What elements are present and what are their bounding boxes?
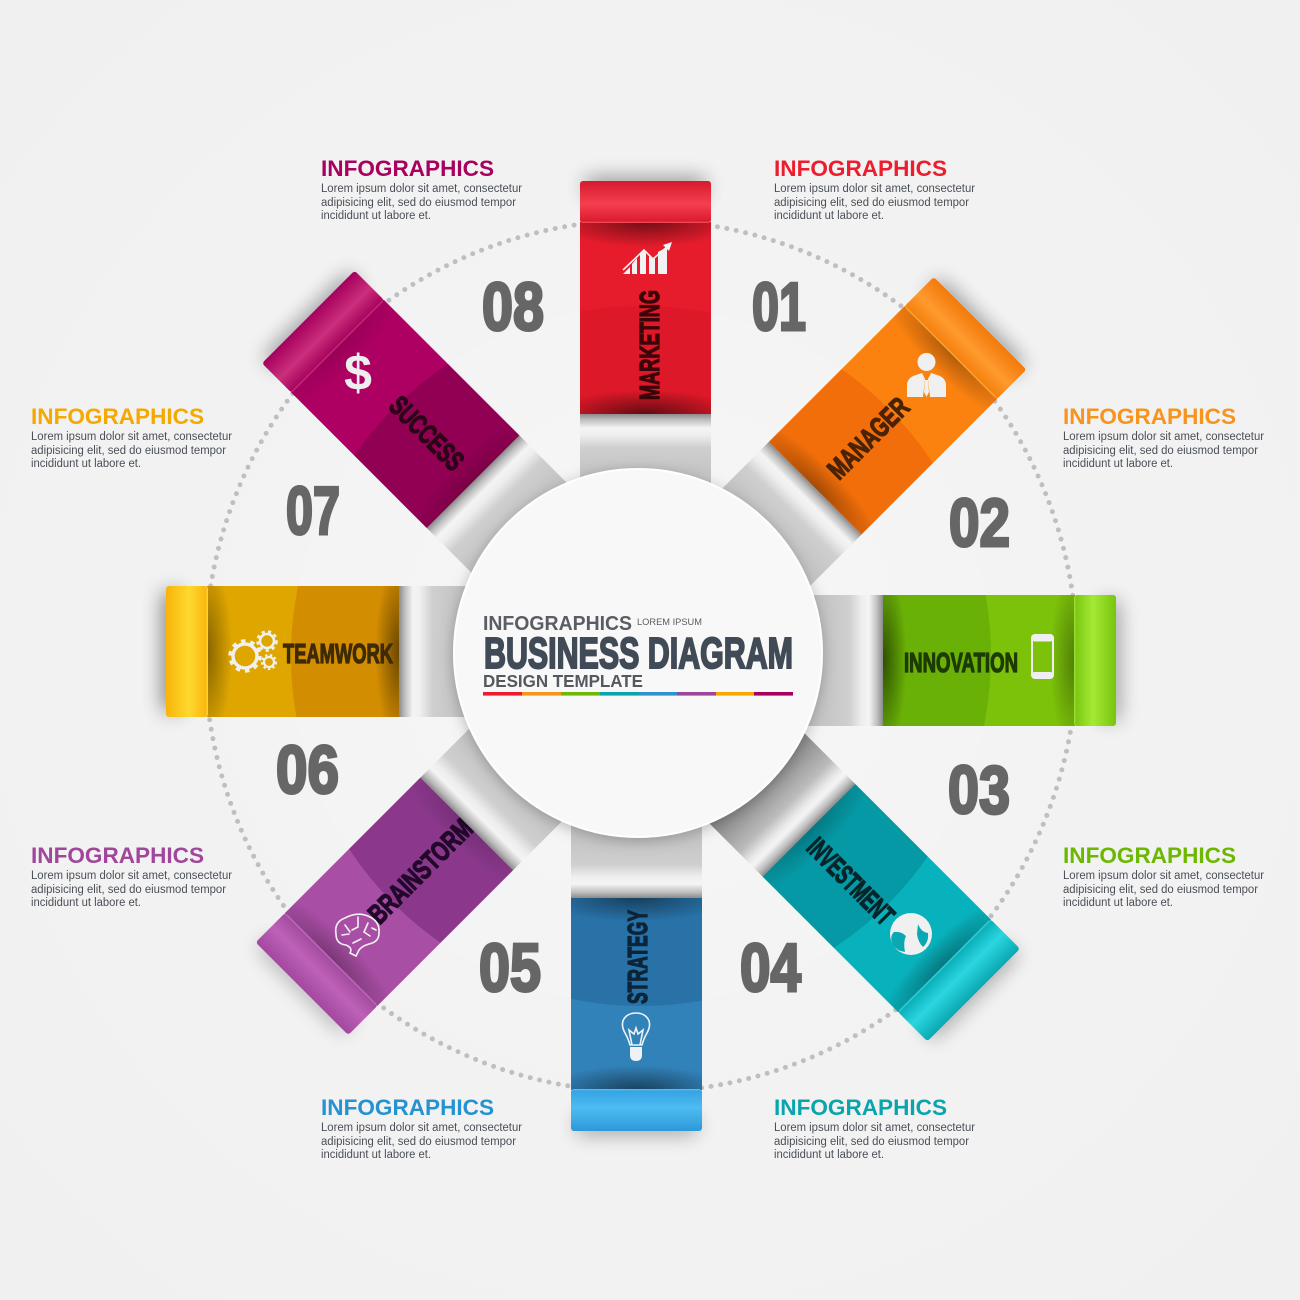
text block 04: incididunt ut labore et. (774, 1149, 884, 1161)
ribbon label: investment: INVESTMENT (801, 831, 901, 931)
text block 07: Lorem ipsum dolor sit amet, consectetur (31, 431, 232, 443)
text block 02: incididunt ut labore et. (1063, 458, 1173, 470)
icon: growth chart (623, 242, 672, 274)
text block 04: INFOGRAPHICS (774, 1095, 947, 1120)
text block 06 (31, 843, 232, 909)
text block 01: incididunt ut labore et. (774, 210, 884, 222)
text block 02: INFOGRAPHICS (1063, 404, 1236, 429)
text block 03: incididunt ut labore et. (1063, 897, 1173, 909)
ribbon 08 magenta (256, 265, 566, 572)
number 07: 07 (286, 473, 340, 549)
text block 01: INFOGRAPHICS (774, 156, 947, 181)
title: infographics: INFOGRAPHICS (483, 613, 632, 635)
text block 05: INFOGRAPHICS (321, 1095, 494, 1120)
ribbon label: strategy: STRATEGY (622, 910, 653, 1004)
ribbon 04 teal (710, 733, 1024, 1046)
text block 05: incididunt ut labore et. (321, 1149, 431, 1161)
text block 04: Lorem ipsum dolor sit amet, consectetur (774, 1122, 975, 1134)
text block 01: Lorem ipsum dolor sit amet, consectetur (774, 183, 975, 195)
text block 06: Lorem ipsum dolor sit amet, consectetur (31, 870, 232, 882)
text block 07: INFOGRAPHICS (31, 404, 204, 429)
icon: globe (890, 913, 932, 955)
ribbon label: success: SUCCESS (383, 390, 470, 477)
ribbon 02 orange (722, 272, 1032, 586)
ribbon label: innovation: INNOVATION (904, 647, 1018, 678)
icon: dollar sign: $ (344, 345, 372, 401)
ribbon 05 blue (567, 826, 706, 1146)
subtitle: design template: DESIGN TEMPLATE (483, 671, 643, 691)
central circle (454, 469, 822, 837)
text block 07: incididunt ut labore et. (31, 458, 141, 470)
icon: manager person (907, 353, 946, 397)
ribbon label: teamwork: TEAMWORK (283, 638, 393, 669)
icon: light bulb (622, 1013, 650, 1061)
text block 02: Lorem ipsum dolor sit amet, consectetur (1063, 431, 1264, 443)
ribbon label: marketing: MARKETING (634, 290, 665, 400)
infographic canvas (32, 160, 1264, 1158)
text block 01 (774, 156, 975, 222)
number 06: 06 (276, 732, 339, 808)
number 03: 03 (948, 752, 1010, 828)
text block 02 (1063, 404, 1264, 470)
text block 06: INFOGRAPHICS (31, 843, 204, 868)
number 01: 01 (752, 269, 806, 345)
ribbon label: brainstorm: BRAINSTORM (362, 813, 479, 930)
center title block (483, 613, 793, 696)
rainbow colour bar (483, 692, 793, 696)
icon: smartphone (1032, 635, 1053, 678)
text block 05 (321, 1095, 522, 1161)
text block 04 (774, 1095, 975, 1161)
ribbon 06 purple (252, 728, 562, 1038)
text block 06: incididunt ut labore et. (31, 897, 141, 909)
number 02: 02 (949, 485, 1010, 561)
text block 08: incididunt ut labore et. (321, 210, 431, 222)
ribbon label: manager: MANAGER (821, 391, 915, 485)
ribbon 07 yellow (148, 580, 466, 723)
text block 07: adipisicing elit, sed do eiusmod tempor (31, 445, 226, 457)
text block 03: INFOGRAPHICS (1063, 843, 1236, 868)
text block 05: adipisicing elit, sed do eiusmod tempor (321, 1136, 516, 1148)
dotted ring (205, 220, 1077, 1092)
text block 08: INFOGRAPHICS (321, 156, 494, 181)
text block 03: Lorem ipsum dolor sit amet, consectetur (1063, 870, 1264, 882)
ribbon 03 green (808, 590, 1132, 730)
ribbon 01 red (575, 164, 716, 483)
text block 05: Lorem ipsum dolor sit amet, consectetur (321, 1122, 522, 1134)
number 08: 08 (482, 269, 544, 345)
subtitle: lorem ipsum: LOREM IPSUM (637, 617, 702, 628)
text block 08: adipisicing elit, sed do eiusmod tempor (321, 197, 516, 209)
number 05: 05 (479, 930, 541, 1006)
text block 06: adipisicing elit, sed do eiusmod tempor (31, 884, 226, 896)
icon: brain (336, 914, 379, 956)
text block 02: adipisicing elit, sed do eiusmod tempor (1063, 445, 1258, 457)
text block 07 (31, 404, 232, 470)
text block 03: adipisicing elit, sed do eiusmod tempor (1063, 884, 1258, 896)
title: business diagram: BUSINESS DIAGRAM (484, 629, 793, 678)
text block 03 (1063, 843, 1264, 909)
text block 04: adipisicing elit, sed do eiusmod tempor (774, 1136, 969, 1148)
icon: gears (230, 632, 276, 671)
text block 08 (321, 156, 522, 222)
text block 08: Lorem ipsum dolor sit amet, consectetur (321, 183, 522, 195)
number 04: 04 (740, 930, 801, 1006)
text block 01: adipisicing elit, sed do eiusmod tempor (774, 197, 969, 209)
